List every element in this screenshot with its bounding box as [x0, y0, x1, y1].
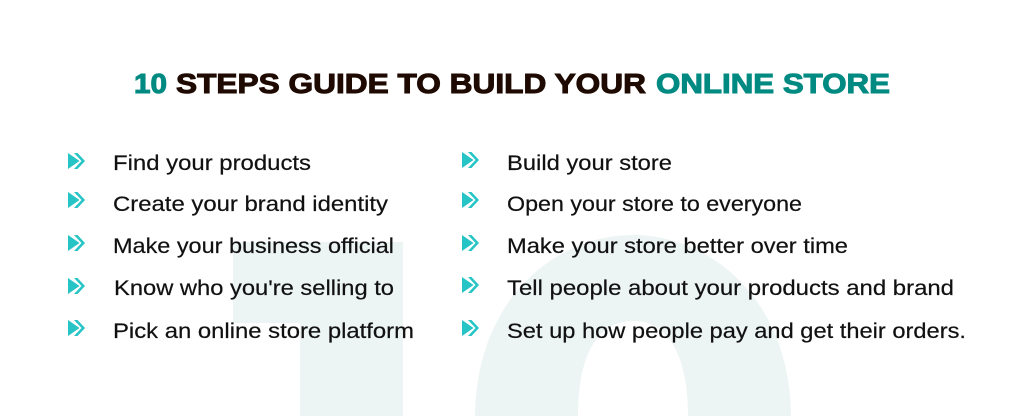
icon: step 3 arrow — [68, 235, 85, 251]
step 9: Tell people about your products and brand — [507, 277, 954, 300]
step 5: Pick an online store platform — [113, 320, 414, 343]
step 6: Build your store — [507, 152, 672, 175]
icon: step 6 arrow — [462, 152, 479, 168]
step 2: Create your brand identity — [113, 193, 389, 216]
title: 10 — [134, 68, 167, 99]
icon: step 10 arrow — [462, 320, 479, 336]
step 3: Make your business official — [113, 235, 394, 258]
step 10: Set up how people pay and get their orders. — [507, 320, 966, 343]
icon: step 7 arrow — [462, 192, 479, 208]
step 1: Find your products — [113, 152, 311, 175]
background numeral 10 — [233, 235, 791, 416]
right steps list — [462, 152, 966, 343]
left steps list — [68, 152, 414, 343]
icon: step 4 arrow — [68, 278, 85, 294]
title — [134, 68, 890, 99]
title: ONLINE STORE — [656, 68, 890, 99]
icon: step 8 arrow — [462, 235, 479, 251]
title: STEPS GUIDE TO BUILD YOUR — [176, 68, 646, 99]
icon: step 9 arrow — [462, 277, 479, 293]
step 7: Open your store to everyone — [507, 193, 802, 216]
step 4: Know who you're selling to — [114, 277, 394, 300]
icon: step 2 arrow — [68, 192, 85, 208]
step 8: Make your store better over time — [507, 235, 848, 258]
icon: step 1 arrow — [68, 153, 85, 169]
icon: step 5 arrow — [68, 320, 85, 336]
